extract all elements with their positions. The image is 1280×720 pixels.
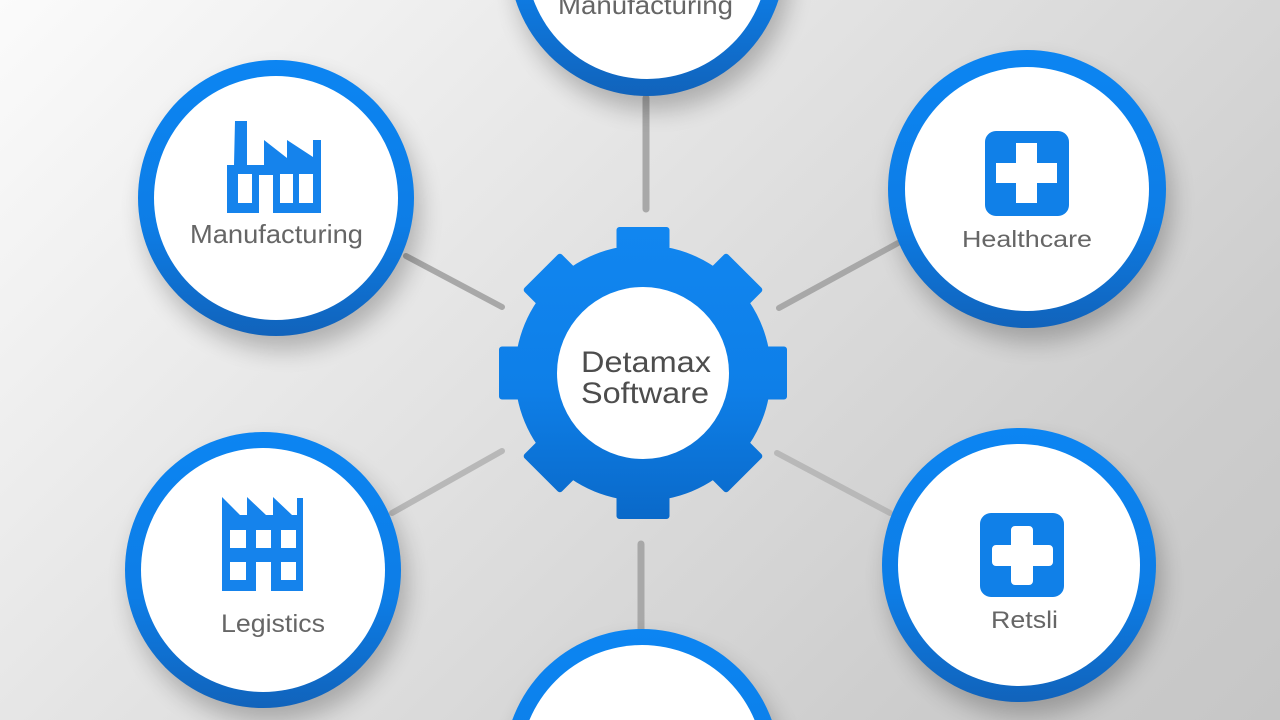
label: logistics: Legistics [221,610,325,638]
icon: building [222,497,303,591]
label: retail: Retsli [991,607,1058,634]
gear shape [502,230,784,516]
label: left manufacturing: Manufacturing [190,219,363,249]
node: left manufacturing [138,60,420,350]
node: healthcare [888,50,1172,342]
central gear [502,230,784,516]
connector lines [392,98,898,632]
node: bottom [504,629,786,720]
gear hub [557,287,729,459]
label: healthcare: Healthcare [962,226,1092,252]
center label [581,346,711,410]
node: top manufacturing [509,0,791,110]
icon: medical cross [980,513,1064,597]
center label: Detamax [581,346,711,379]
center label: Software [581,377,709,410]
node: retail [882,428,1162,716]
node: logistics [125,432,407,720]
icon: medical cross [985,131,1069,216]
icon: factory [227,121,321,213]
